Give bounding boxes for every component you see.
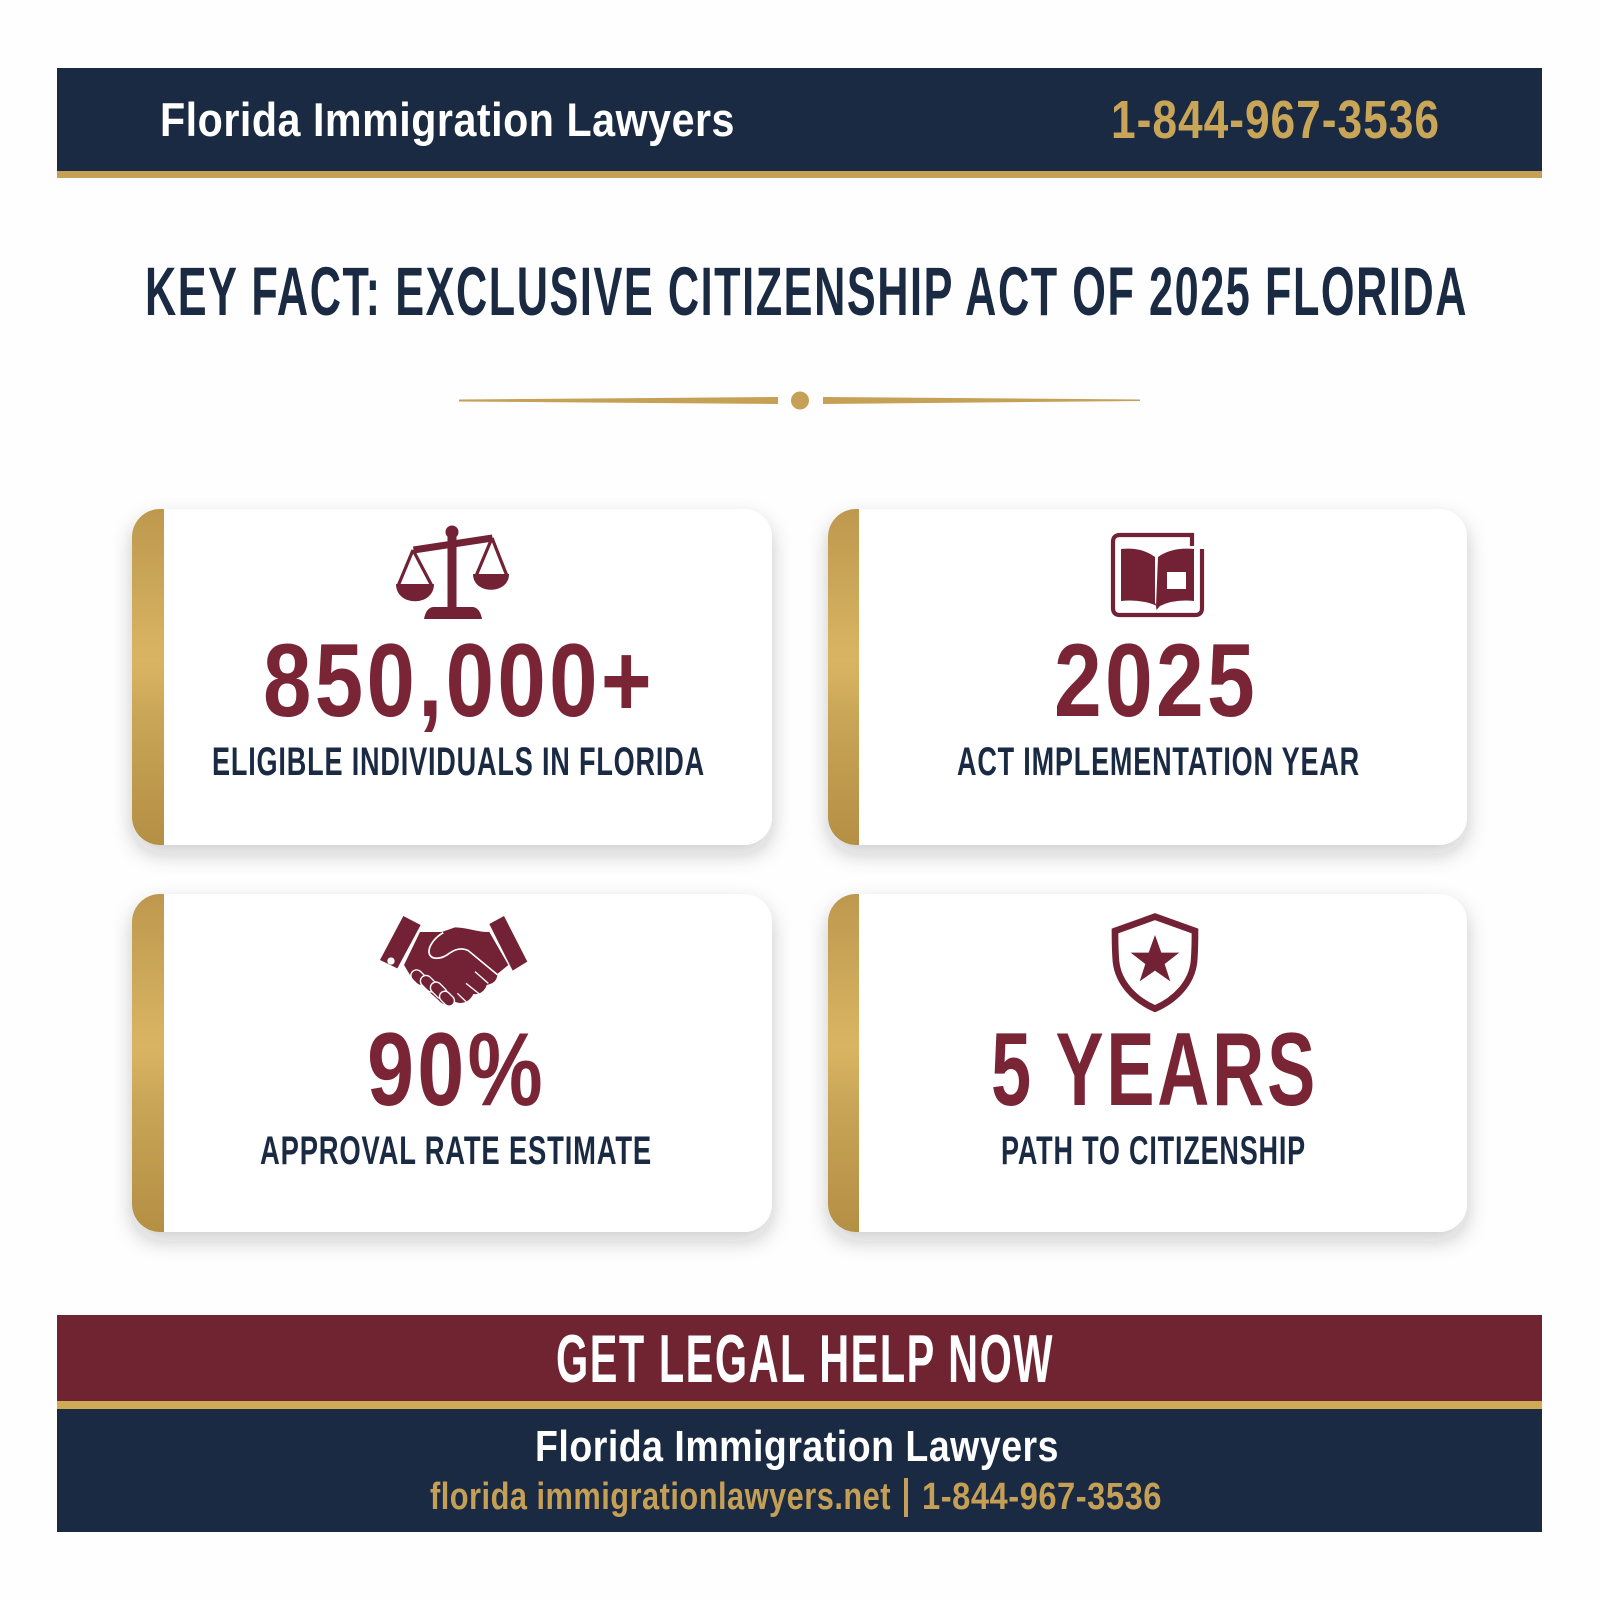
panel: path to citizenship bbox=[828, 894, 1467, 1232]
stat: 90%: 90% bbox=[367, 1012, 546, 1128]
footer phone number: 1-844-967-3536 bbox=[922, 1476, 1162, 1518]
title divider bbox=[459, 392, 1140, 410]
label: eligible individuals in Florida: ELIGIBLE INDIVIDUALS IN FLORIDA bbox=[212, 740, 705, 784]
header bar bbox=[57, 68, 1542, 178]
stat: 850,000+: 850,000+ bbox=[263, 623, 655, 739]
call to action text: GET LEGAL HELP NOW bbox=[556, 1321, 1054, 1397]
icon: law book bbox=[1113, 535, 1202, 615]
footer contact bar bbox=[57, 1409, 1542, 1532]
footer firm name: Florida Immigration Lawyers bbox=[535, 1422, 1059, 1471]
footer website: florida immigrationlawyers.net bbox=[430, 1476, 891, 1518]
header phone number: 1-844-967-3536 bbox=[1111, 90, 1440, 150]
footer separator bbox=[904, 1478, 908, 1517]
label: path to citizenship: PATH TO CITIZENSHIP bbox=[1001, 1129, 1306, 1173]
footer call to action banner bbox=[57, 1315, 1542, 1409]
label: approval rate estimate: APPROVAL RATE ESTIMATE bbox=[260, 1129, 652, 1173]
icon: scales of justice bbox=[396, 526, 509, 619]
panel: eligible individuals bbox=[132, 509, 772, 845]
icon: handshake bbox=[380, 916, 527, 1008]
panel: implementation year bbox=[828, 509, 1467, 845]
stat: 2025: 2025 bbox=[1054, 623, 1258, 739]
label: act implementation year: ACT IMPLEMENTATION YEAR bbox=[957, 740, 1360, 784]
header firm name: Florida Immigration Lawyers bbox=[160, 93, 735, 146]
stat: 5 years: 5 YEARS bbox=[991, 1012, 1318, 1128]
icon: shield with star bbox=[1115, 917, 1195, 1009]
panel: approval rate bbox=[132, 894, 772, 1232]
